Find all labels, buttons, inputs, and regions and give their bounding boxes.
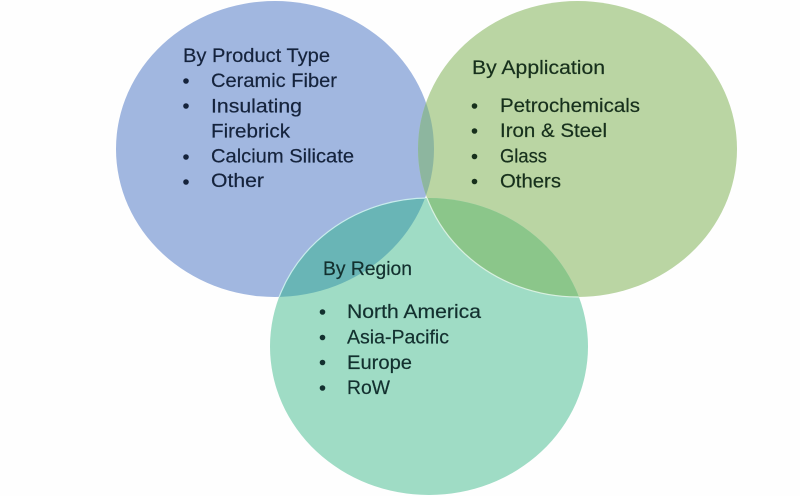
list item: Others (500, 172, 561, 192)
list item: RoW (347, 378, 390, 399)
text block: by product type (183, 46, 354, 192)
list item: Glass (500, 146, 547, 168)
list item: Calcium Silicate (211, 146, 354, 168)
list item continuation: Firebrick (211, 122, 291, 142)
heading: by application: By Application (472, 58, 605, 79)
venn diagram (116, 1, 737, 495)
list item: Iron & Steel (500, 121, 607, 142)
list item: Petrochemicals (500, 96, 640, 117)
overlap edge: region outline (278, 198, 425, 297)
overlap: product type and region (280, 198, 425, 297)
heading: by region: By Region (323, 259, 412, 280)
bullets: applications (472, 103, 477, 184)
text block: by application (472, 58, 640, 192)
list item: Ceramic Fiber (211, 71, 338, 92)
circle: by region (270, 198, 588, 495)
list item: Other (211, 171, 265, 192)
list item: Asia-Pacific (347, 328, 449, 348)
list item: Europe (347, 353, 412, 374)
text block: by region (320, 259, 481, 399)
list item: Insulating (211, 96, 302, 118)
circle: by product type (116, 1, 434, 297)
list item: North America (347, 302, 481, 323)
circle: by application (418, 1, 737, 297)
bullets: regions (320, 309, 325, 391)
overlap: application and region (428, 198, 579, 297)
bullets: product types (183, 78, 189, 185)
heading: by product type: By Product Type (183, 46, 330, 67)
overlap: product type and application (418, 103, 434, 195)
overlap edge: application outline (426, 198, 579, 298)
